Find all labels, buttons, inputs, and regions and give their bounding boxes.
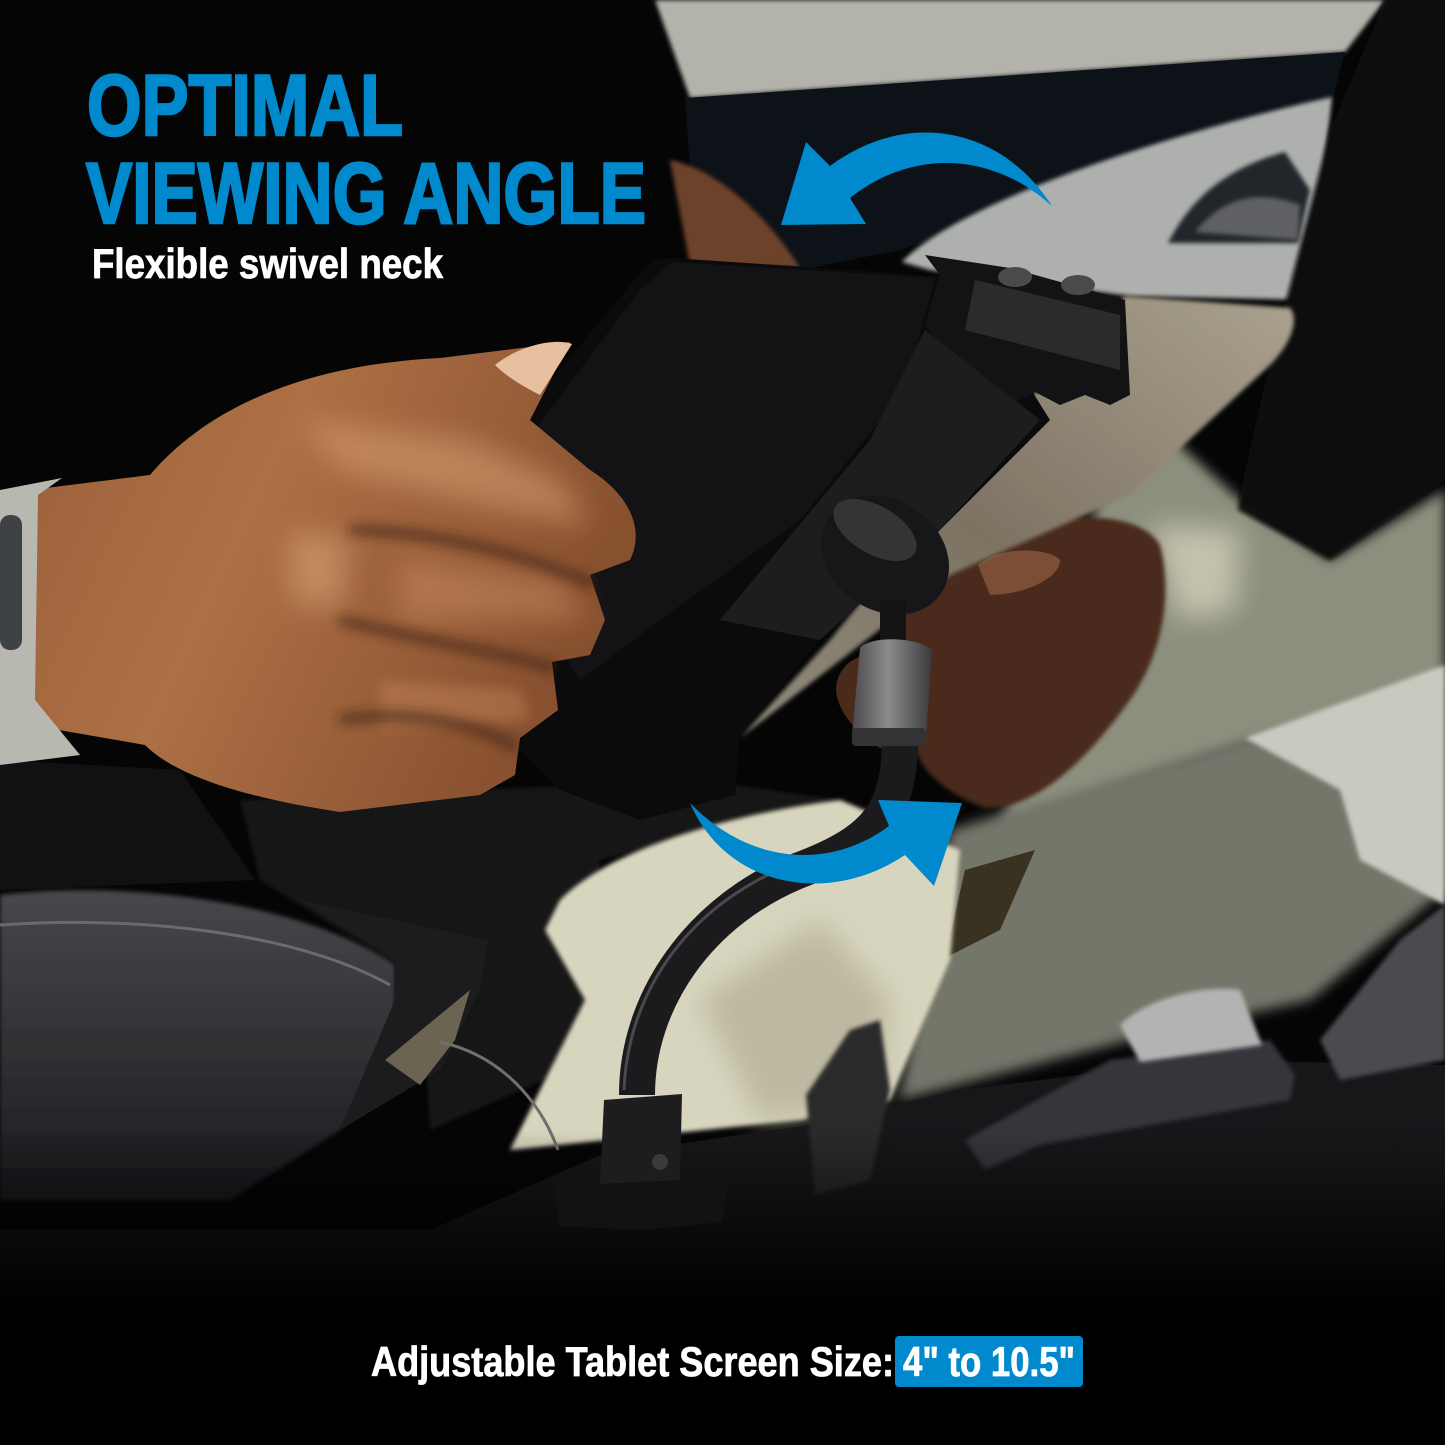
left hand bbox=[15, 342, 636, 812]
thumbnail bbox=[495, 342, 572, 395]
knuckle highlights bbox=[300, 420, 590, 525]
stitch line bbox=[0, 922, 390, 985]
subtitle: Flexible swivel neck bbox=[92, 240, 444, 287]
console lower bbox=[0, 1060, 1445, 1445]
olive upper shirt bbox=[1000, 400, 1445, 830]
wrist and back of hand bbox=[15, 342, 636, 812]
white trouser highlight bbox=[1245, 665, 1445, 905]
cable bbox=[440, 1042, 558, 1150]
olive trousers bbox=[900, 690, 1445, 1100]
right hand fingertip bbox=[978, 550, 1060, 595]
footer size badge: 4" to 10.5" bbox=[903, 1338, 1075, 1385]
left seat dark bbox=[0, 760, 255, 890]
A pillar bbox=[1238, 0, 1445, 560]
right hand little finger bbox=[836, 637, 950, 748]
door panel bbox=[902, 97, 1332, 300]
swivel knob bbox=[798, 471, 972, 639]
bottom dark fade bbox=[0, 1130, 1445, 1310]
title: OPTIMAL bbox=[87, 58, 403, 154]
arm rest bbox=[0, 890, 395, 1200]
console buttons bbox=[965, 1040, 1295, 1170]
stem bbox=[880, 600, 906, 640]
footer label: Adjustable Tablet Screen Size: bbox=[371, 1338, 894, 1385]
finger creases bbox=[350, 530, 595, 585]
cream trousers bbox=[510, 800, 960, 1150]
metal joint bbox=[852, 639, 932, 735]
tablet clamp bbox=[925, 255, 1130, 405]
smart watch bbox=[0, 478, 80, 765]
arrow: bottom swivel bbox=[690, 800, 962, 886]
light patch beside hand bbox=[1150, 525, 1240, 620]
right hand bbox=[880, 517, 1165, 808]
forearm behind tablet bbox=[670, 160, 800, 268]
tablet silver rear bbox=[740, 296, 1294, 738]
title line two: VIEWING ANGLE bbox=[86, 146, 646, 242]
arrow: top swivel bbox=[781, 133, 1052, 225]
black trousers bbox=[240, 780, 840, 1130]
handbrake lever bbox=[806, 1020, 890, 1195]
car ceiling / window bbox=[655, 0, 1385, 98]
door frame band bbox=[685, 52, 1345, 270]
door handle bbox=[1168, 152, 1310, 243]
clamp arm bbox=[720, 330, 1040, 640]
tablet black body bbox=[510, 258, 1050, 820]
gooseneck mount bbox=[552, 600, 932, 1230]
label on trousers bbox=[945, 850, 1035, 958]
mount base bbox=[552, 1168, 728, 1230]
flexible neck bbox=[637, 735, 900, 1095]
